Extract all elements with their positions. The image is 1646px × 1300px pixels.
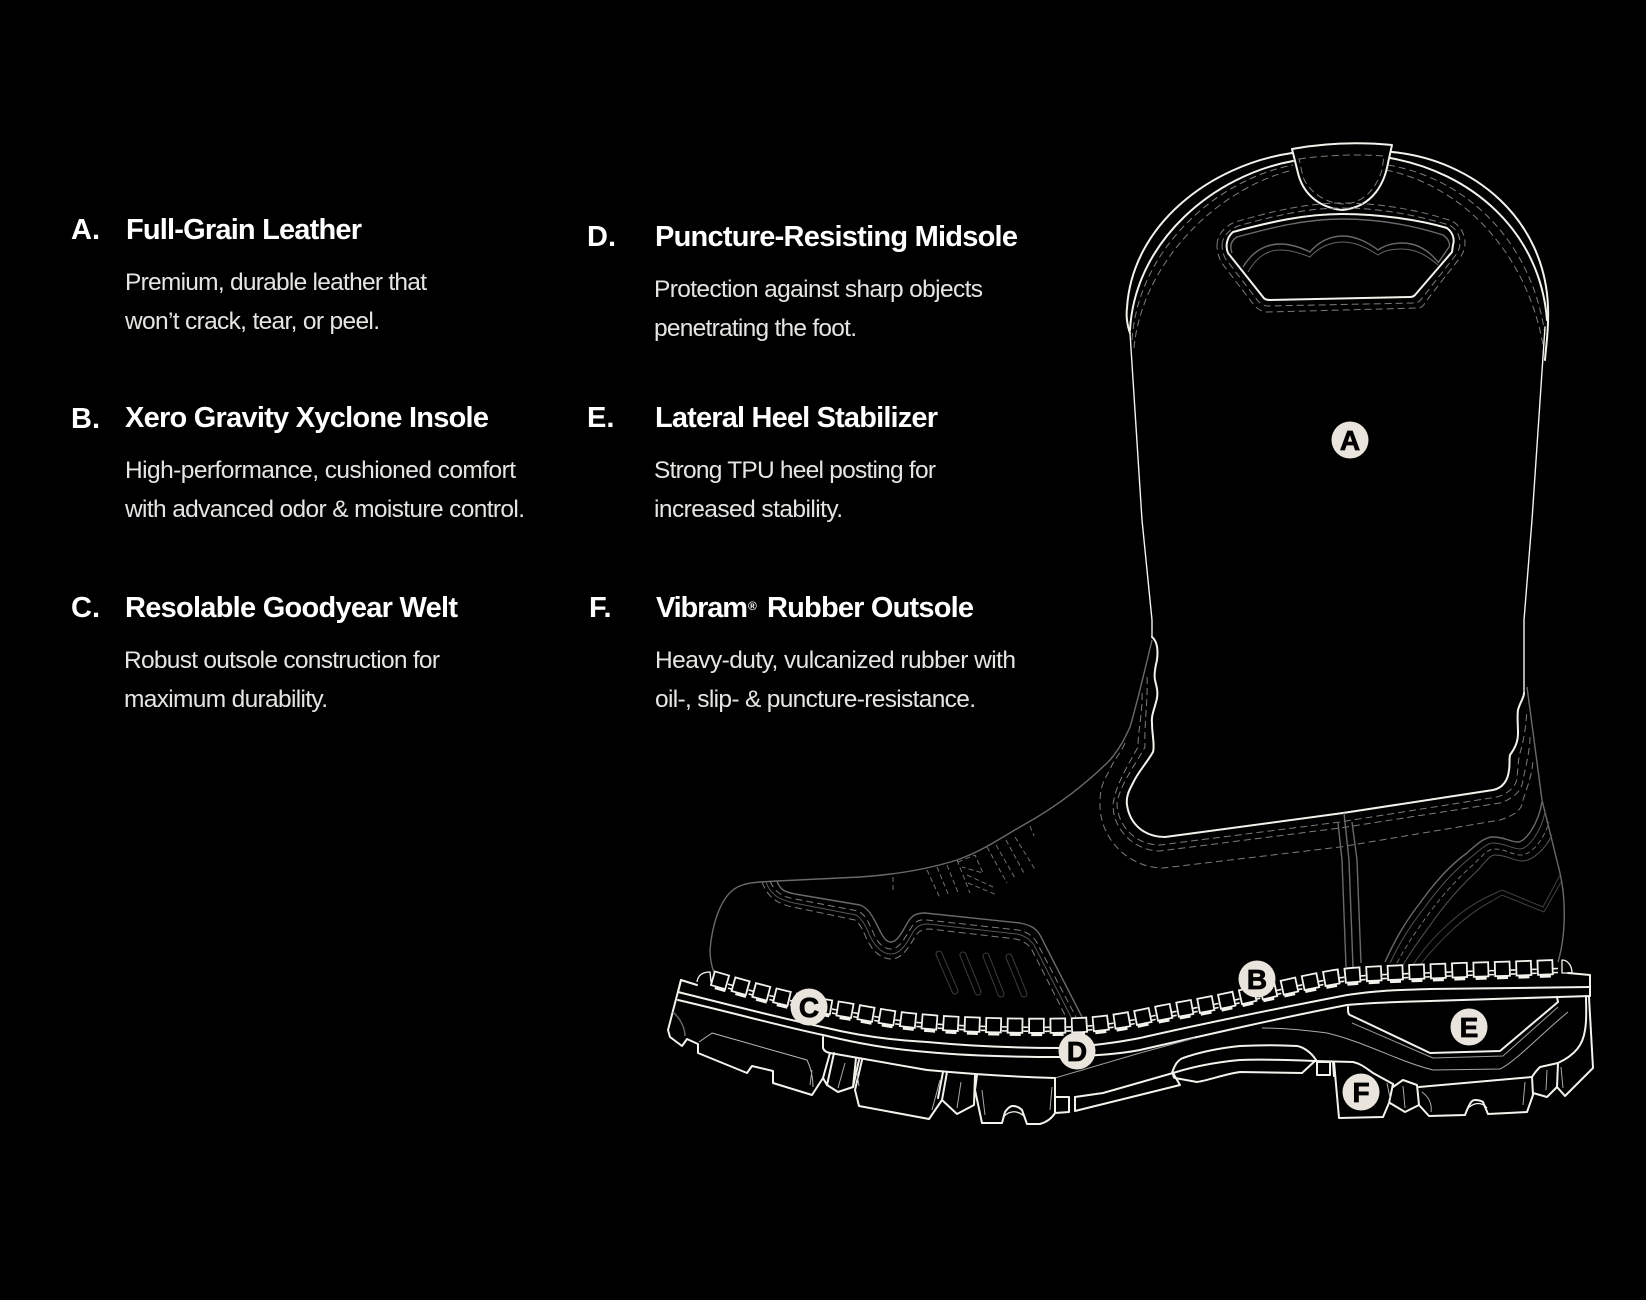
boot shaft outline [1127,327,1545,837]
marker C: C [799,992,819,1023]
handle opening [1217,203,1465,312]
marker F: F [1352,1077,1370,1108]
heel outline [1527,687,1564,962]
feature C: welt: C. [71,592,100,624]
description C: maximum durability. [124,686,328,713]
heading F: Rubber Outsole [767,592,974,624]
welt and midsole lines [678,973,1590,1078]
arch shank [1055,1045,1393,1113]
description E: Strong TPU heel posting for [654,457,936,484]
marker F [1342,1074,1380,1110]
feature F: outsole: F. [589,592,612,624]
marker D [1058,1032,1096,1070]
feature D: midsole: D. [587,221,616,253]
toe cap [762,881,1082,1017]
back seam [1338,813,1361,967]
welt stitching teeth [697,960,1572,1034]
description E: increased stability. [654,496,843,523]
vamp outline [710,640,1152,975]
heel stabilizer panel [1262,997,1568,1070]
heading B: Xero Gravity Xyclone Insole [125,402,489,434]
heading F: Vibram [656,592,748,624]
heading F [656,592,974,624]
shaft band stitching [1100,677,1533,868]
description E [654,457,936,523]
boot shaft collar [1127,152,1548,360]
description F: Heavy-duty, vulcanized rubber with [655,647,1016,674]
description A: Premium, durable leather that [125,269,427,296]
marker D: D [1067,1036,1087,1067]
marker A [1332,422,1368,458]
heading D: Puncture-Resisting Midsole [655,221,1018,253]
marker C [790,988,828,1026]
description D [654,276,983,342]
marker A: A [1340,425,1360,456]
feature B: insole [71,402,525,523]
pull tab [1292,143,1392,210]
feature B: insole: B. [71,403,100,435]
description B: with advanced odor & moisture control. [124,496,525,523]
description A: won’t crack, tear, or peel. [124,308,380,335]
description C: Robust outsole construction for [124,647,440,674]
description D: penetrating the foot. [654,315,857,342]
heel counter [1385,802,1561,965]
description D: Protection against sharp objects [654,276,983,303]
description A [124,269,427,335]
boot line illustration [668,143,1593,1124]
description C [124,647,440,713]
heading F: ® [748,599,757,613]
outsole front lugs [810,1053,1055,1124]
description B [124,457,525,523]
marker B: B [1247,964,1267,995]
description B: High-performance, cushioned comfort [125,457,516,484]
outsole toe block [668,980,823,1095]
feature D: midsole [587,221,1018,342]
marker E: E [1460,1012,1478,1043]
feature A: full-grain leather [71,214,427,335]
marker E [1450,1008,1488,1046]
vamp stitching [893,826,1036,898]
heading E: Lateral Heel Stabilizer [655,402,938,434]
feature F: outsole [589,592,1016,713]
description F [655,647,1016,713]
heading A: Full-Grain Leather [126,214,362,246]
marker B [1238,960,1276,998]
description F: oil-, slip- & puncture-resistance. [655,686,976,713]
feature A: full-grain leather: A. [71,214,100,246]
feature C: welt [71,592,458,713]
feature E: heel stabilizer: E. [587,402,614,434]
heading C: Resolable Goodyear Welt [125,592,458,624]
toe slots [939,954,1024,994]
feature E: heel stabilizer [587,402,938,523]
outsole heel lugs [1334,997,1593,1118]
